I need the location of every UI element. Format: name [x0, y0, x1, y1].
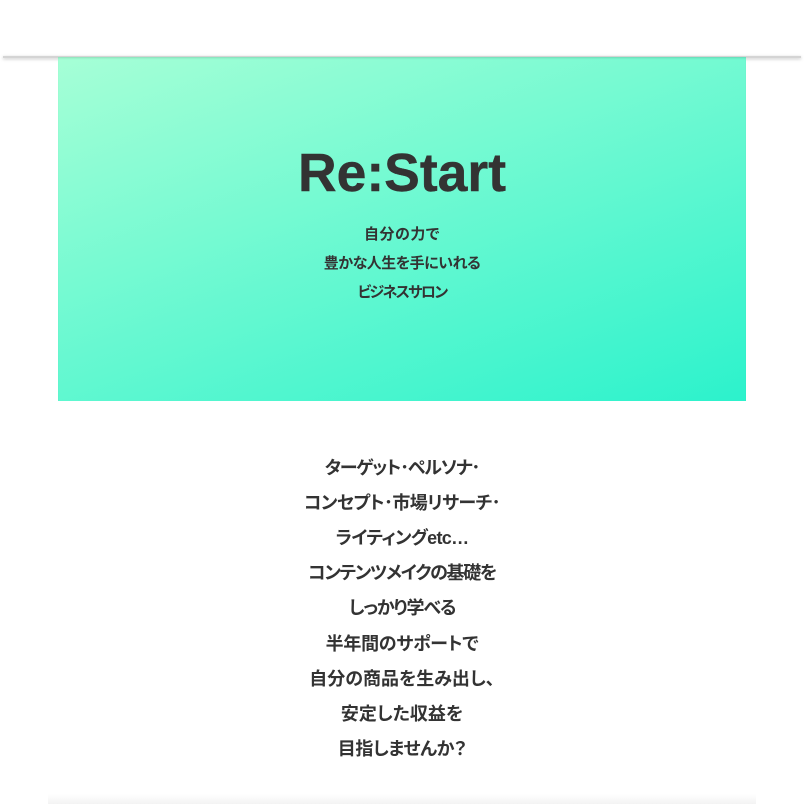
- subtitle: [324, 226, 480, 301]
- body text block: 自分の商品を生み出し、: [309, 669, 495, 689]
- body text block: ターゲット･ペルソナ･: [325, 458, 479, 478]
- body text block: 目指しませんか？: [338, 739, 466, 759]
- body text block: ライティングetc…: [336, 528, 468, 548]
- body text block: しっかり学べる: [349, 598, 455, 618]
- body text block: [304, 458, 500, 759]
- subtitle: ビジネスサロン: [358, 284, 446, 301]
- top bar shadow: [3, 56, 801, 58]
- bottom panel shadow: [48, 794, 756, 804]
- body text block: 安定した収益を: [341, 704, 463, 724]
- subtitle: 豊かな人生を手にいれる: [324, 255, 480, 272]
- subtitle: 自分の力で: [364, 226, 440, 243]
- title: Re:Start: [298, 144, 506, 203]
- body text block: コンセプト･市場リサーチ･: [304, 493, 500, 513]
- body text block: 半年間のサポートで: [326, 634, 478, 654]
- hero panel: [58, 57, 746, 401]
- body text block: コンテンツメイクの基礎を: [308, 563, 496, 583]
